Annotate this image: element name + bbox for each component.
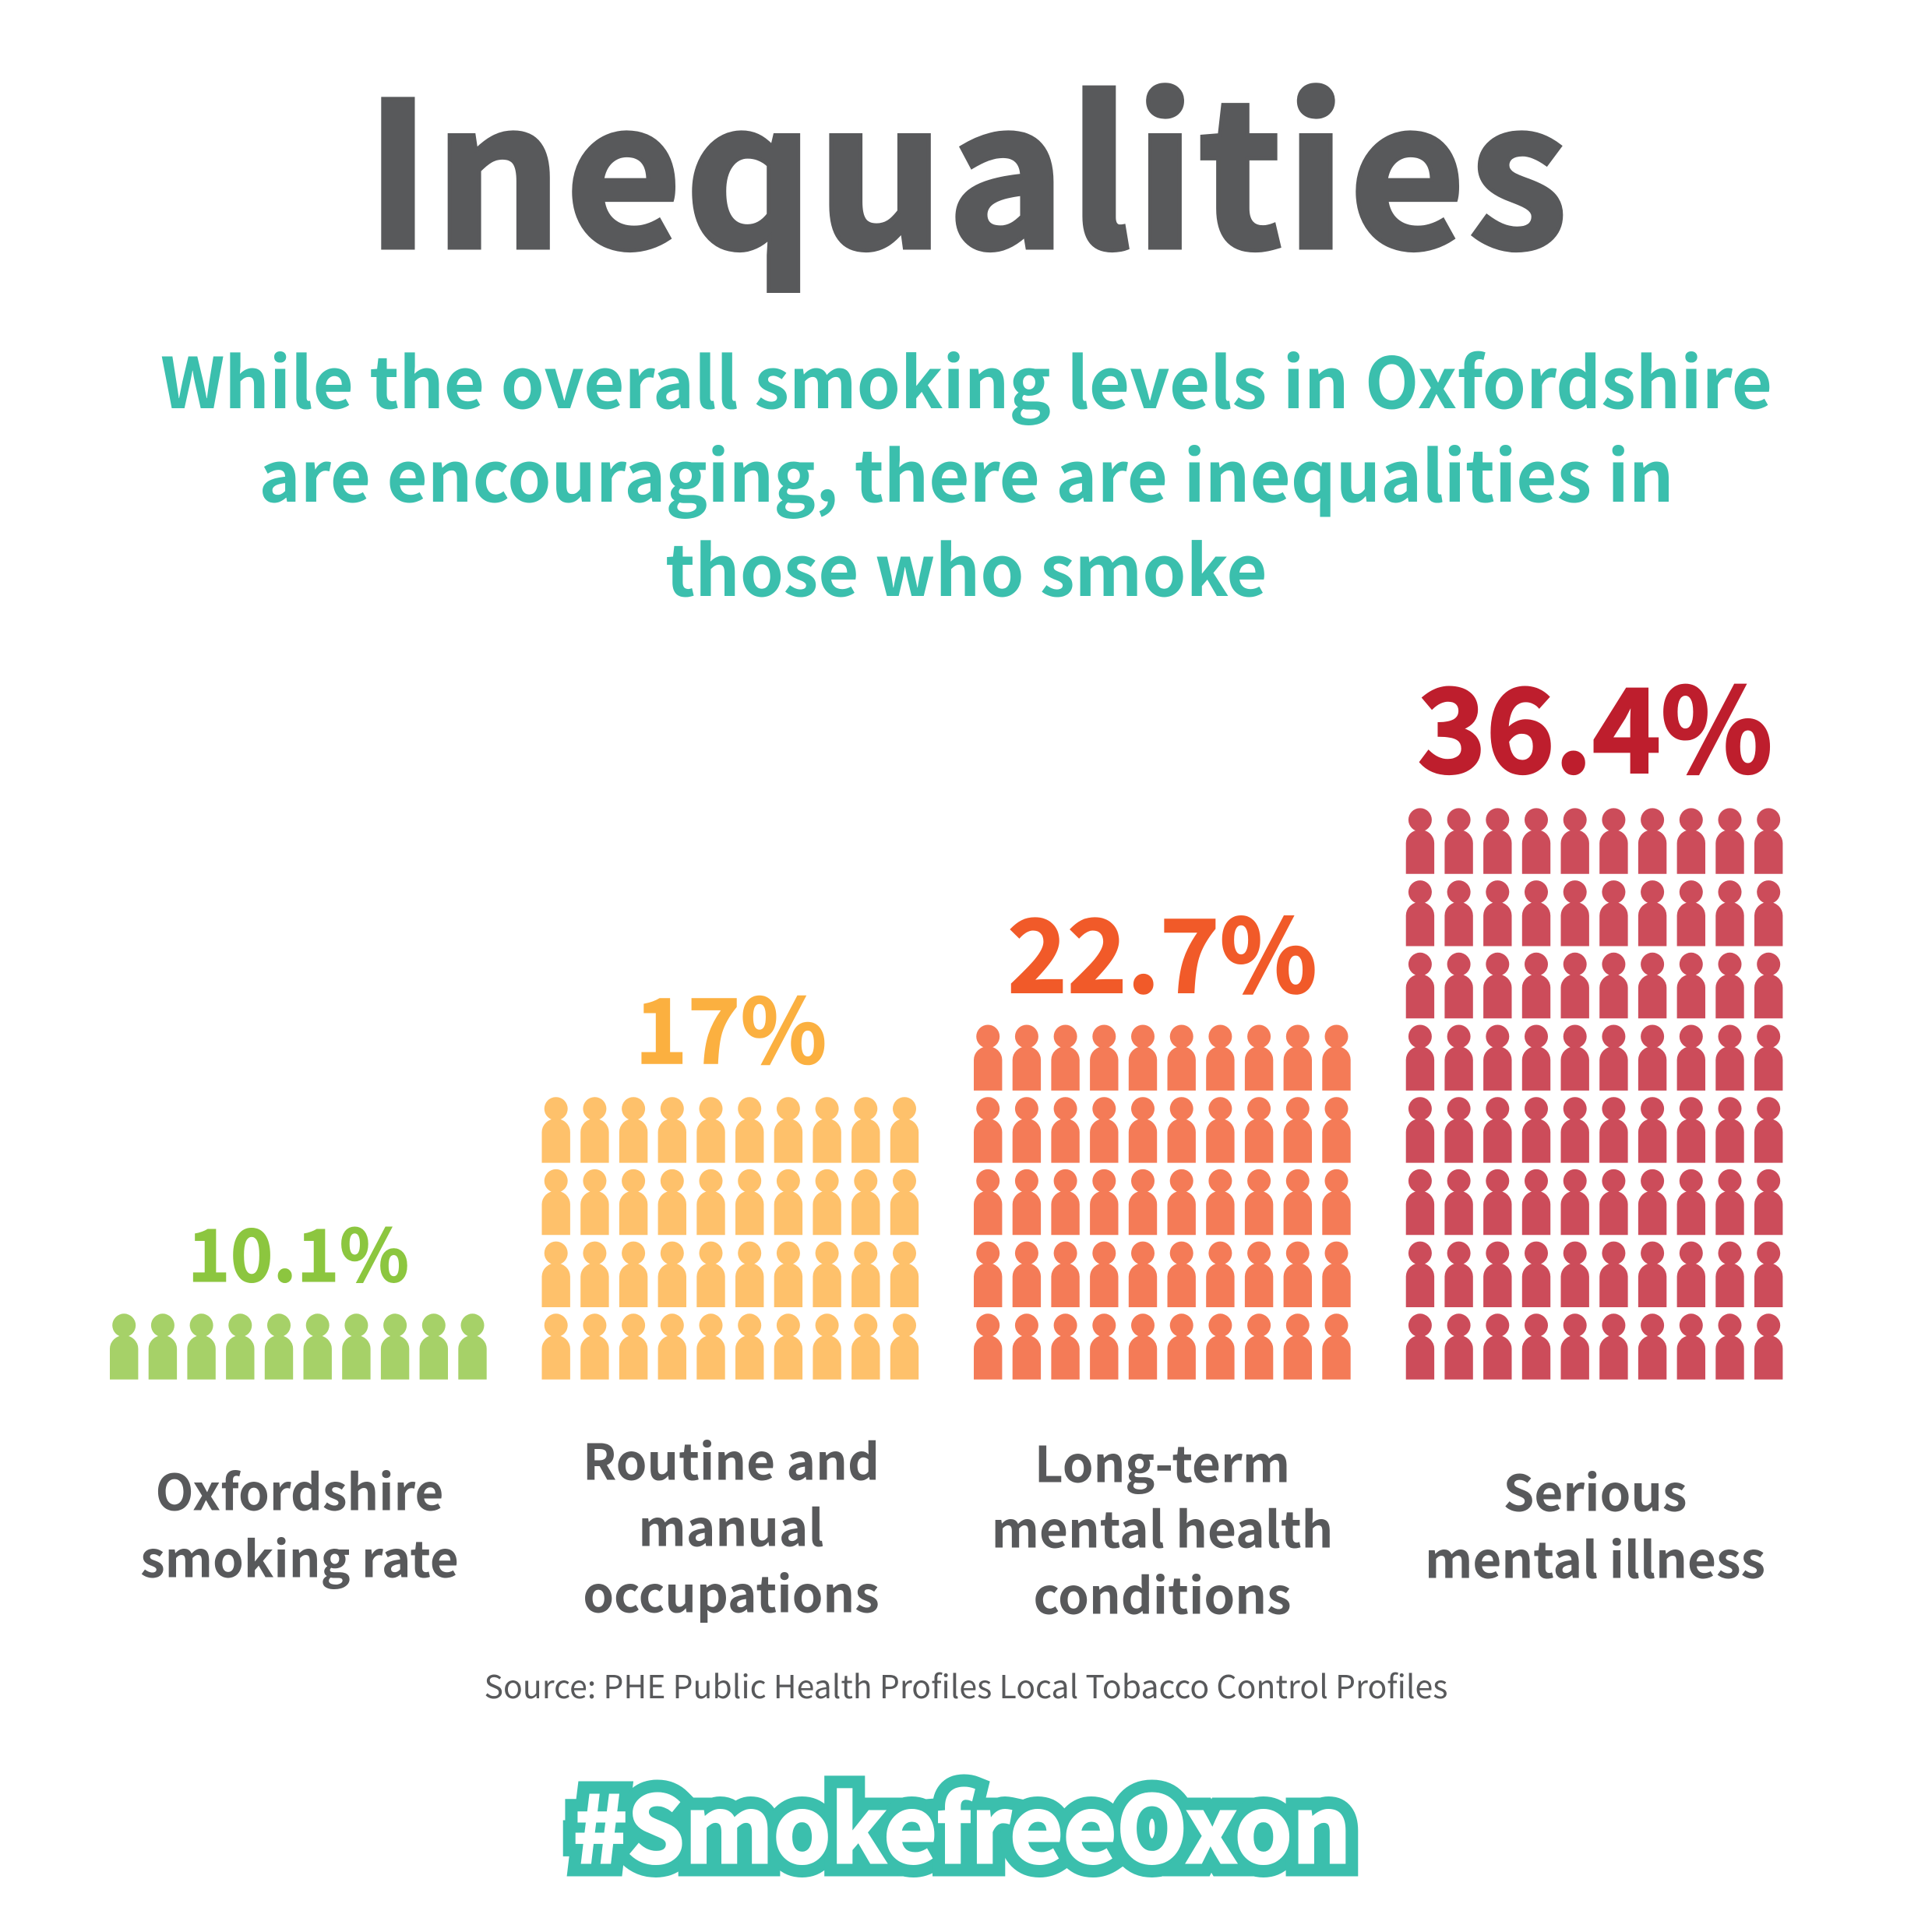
label: conditions [1033, 1557, 1292, 1628]
label [1425, 1454, 1765, 1592]
label: occupations [583, 1555, 880, 1627]
label [992, 1426, 1333, 1628]
hashtag: #SmokefreeOxon [573, 1756, 1351, 1889]
people pictogram: 1 row, green [110, 1313, 487, 1380]
people pictogram: 8 rows, red [1406, 808, 1782, 1380]
value: 22.7%: 22.7% [1007, 876, 1317, 1022]
subtitle: are encouraging, there are inequalities in [259, 421, 1674, 522]
value: 10.1%: 10.1% [188, 1197, 409, 1303]
people pictogram: 4 rows, yellow [542, 1097, 918, 1380]
column: Serious mental illness [1406, 637, 1782, 1592]
column: Oxfordshire smoking rate [110, 1197, 487, 1592]
label: mental illness [1425, 1521, 1765, 1592]
subtitle: those who smoke [665, 515, 1267, 616]
label: mental health [992, 1491, 1333, 1563]
subtitle: While the overall smoking levels in Oxfordshire [160, 327, 1772, 428]
label: smoking rate [140, 1521, 459, 1592]
label [583, 1423, 880, 1627]
title: Inequalities [365, 16, 1571, 306]
column: Long-term mental health conditions [974, 876, 1351, 1628]
column: Routine and manual occupations [542, 961, 918, 1627]
source note: Source: PHE Public Health Profiles Local Tobacco Control Profiles [485, 1661, 1447, 1708]
hashtag: #SmokefreeOxon [573, 1756, 1351, 1889]
label: Routine and [583, 1423, 880, 1494]
subtitle [160, 327, 1772, 616]
label: manual [638, 1490, 824, 1561]
people pictogram: 5 rows, orange [974, 1025, 1351, 1380]
label: Oxfordshire [155, 1454, 444, 1525]
value: 17%: 17% [635, 961, 827, 1090]
label: Serious [1504, 1454, 1687, 1525]
label: Long-term [1035, 1426, 1290, 1497]
label [140, 1454, 459, 1592]
value: 36.4%: 36.4% [1418, 637, 1772, 806]
